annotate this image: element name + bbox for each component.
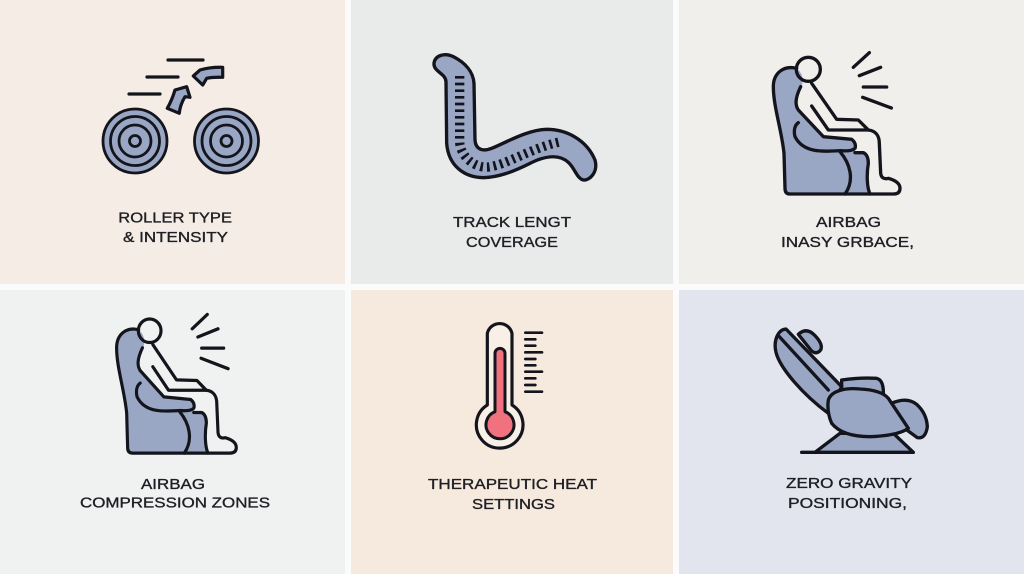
label: airbag top: AIRBAG (816, 214, 881, 231)
label: airbag compression zones: AIRBAG (141, 476, 205, 493)
panel: zero gravity (679, 290, 1024, 574)
icon: reclined chair (775, 329, 927, 452)
label: therapeutic heat: SETTINGS (472, 496, 555, 513)
label: track length: COVERAGE (466, 234, 558, 251)
label: airbag compression zones (80, 476, 270, 512)
label: zero gravity: POSITIONING, (788, 495, 907, 512)
label: therapeutic heat: THERAPEUTIC HEAT (428, 476, 597, 493)
label: airbag compression zones: COMPRESSION ZONES (80, 494, 270, 512)
label: airbag top: INASY GRBACE, (781, 234, 914, 251)
icon: curved track (434, 55, 596, 180)
label: zero gravity: ZERO GRAVITY (786, 475, 912, 492)
panel: track length (351, 0, 673, 284)
label: airbag top (781, 214, 914, 251)
icon: thermometer (476, 324, 542, 448)
label: zero gravity (786, 475, 912, 512)
icon: rollers and motion arrows (103, 60, 258, 173)
label: roller type: ROLLER TYPE (118, 210, 232, 227)
label: therapeutic heat (428, 476, 597, 513)
icon: seated person in chair (117, 314, 236, 453)
icon: seated person in chair (773, 53, 900, 194)
panel: airbag compression zones (0, 290, 345, 574)
label: roller type (118, 210, 232, 246)
panel: roller type (0, 0, 345, 284)
label: track length: TRACK LENGT (453, 214, 571, 231)
label: track length (453, 214, 571, 251)
panel: airbag top (679, 0, 1024, 284)
panel: therapeutic heat (351, 290, 673, 574)
label: roller type: & INTENSITY (123, 229, 228, 246)
